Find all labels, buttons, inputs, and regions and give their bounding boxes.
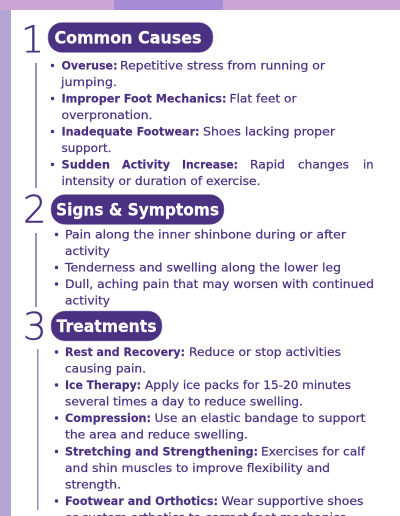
section 3: treatments	[23, 306, 366, 516]
bullet list: treatments: the area and reduce swelling.	[65, 428, 248, 442]
connector line 3	[37, 349, 38, 510]
connector line 1	[35, 63, 37, 188]
bullet list: causes: Sudden	[62, 158, 110, 172]
bullet list: treatments: Wear supportive shoes	[222, 494, 364, 508]
bullet list: treatments: Compression:	[65, 411, 151, 425]
section 2: signs and symptoms	[23, 188, 374, 308]
heading pill: treatments	[51, 311, 162, 341]
bullet list: symptoms: activity	[65, 294, 110, 308]
connector line 2	[35, 233, 37, 307]
bullet list: causes: changes	[298, 158, 349, 172]
bullet list: treatments	[55, 345, 366, 516]
bullet list: treatments: several times a day to reduce swelling.	[65, 394, 303, 408]
bullet list: causes: Overuse:	[62, 58, 118, 72]
bullet list: causes: Improper Foot Mechanics:	[62, 92, 226, 106]
bullet list: symptoms: Tenderness and swelling along the lower leg	[64, 260, 341, 274]
bullet list: causes: jumping.	[60, 75, 117, 89]
number 2: 2	[23, 188, 47, 232]
bullet list: causes: Rapid	[250, 158, 285, 172]
bullet list: treatments: and shin muscles to improve flexibility and	[65, 461, 330, 475]
bullet list: causes: Activity	[122, 158, 170, 172]
bullet list: treatments: Rest and Recovery:	[65, 345, 185, 359]
bullet list: treatments: Ice Therapy:	[65, 378, 141, 392]
left side band	[0, 10, 11, 516]
number 1: 1	[21, 18, 45, 62]
bullet list: treatments: Exercises for calf	[261, 444, 366, 458]
bullet list: causes: Inadequate Footwear:	[62, 124, 200, 138]
bullet list: symptoms: Pain along the inner shinbone during or after	[65, 228, 346, 242]
number 3: 3	[23, 306, 47, 348]
bullet list: causes: in	[363, 158, 374, 172]
bullet list: causes: intensity or duration of exercise.	[62, 174, 260, 188]
bullet list: treatments: Stretching and Strengthening:	[65, 444, 258, 458]
bullet list: symptoms	[55, 228, 374, 308]
bullet list: symptoms: activity	[65, 244, 110, 258]
bullet list: causes: overpronation.	[62, 108, 152, 122]
bullet list: treatments: Use an elastic bandage to support	[154, 411, 366, 425]
heading pill: signs and symptoms: Signs & Symptoms	[56, 200, 219, 220]
section 1: common causes	[21, 18, 374, 188]
bullet list: symptoms: Dull, aching pain that may worsen with continued	[65, 277, 374, 291]
bullet list: causes: Increase:	[182, 158, 238, 172]
bullet list: causes	[51, 58, 374, 188]
bullet list: treatments: strength.	[65, 478, 121, 492]
bullet list: treatments: causing pain.	[65, 362, 146, 376]
bullet list: causes: Repetitive stress from running or	[120, 58, 325, 72]
top band	[0, 0, 400, 10]
bullet list: treatments: Reduce or stop activities	[189, 345, 341, 359]
heading pill: common causes	[48, 22, 213, 52]
bullet list: causes: Shoes lacking proper	[203, 124, 335, 138]
bullet list: treatments: Apply ice packs for 15-20 minutes	[145, 378, 351, 392]
heading pill: treatments: Treatments	[56, 317, 157, 336]
bullet list: treatments: Footwear and Orthotics:	[65, 494, 218, 508]
bullet list: causes: support.	[62, 141, 112, 155]
bullet list: causes: Flat feet or	[230, 92, 297, 106]
heading pill: common causes: Common Causes	[54, 28, 202, 48]
heading pill: signs and symptoms	[51, 194, 224, 224]
